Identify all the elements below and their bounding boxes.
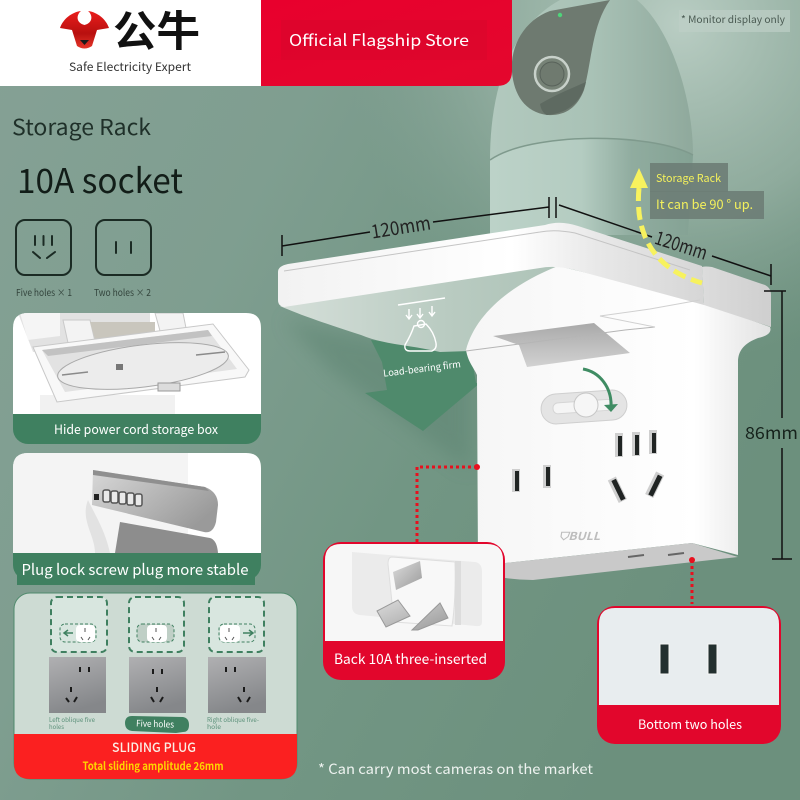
note: monitor display only: * Monitor display only (681, 11, 786, 26)
slide option: centre (129, 597, 186, 713)
tag: five holes: Five holes (136, 716, 174, 731)
load-bearing arrow (365, 340, 480, 431)
socket holes (512, 430, 664, 503)
tag: five holes (125, 716, 189, 733)
shelf right side (702, 266, 771, 327)
heading: 10A socket: 10A socket (17, 154, 183, 203)
callout: storage rack 90 degree: Storage Rack (656, 170, 721, 186)
dimension: height 86mm (745, 291, 798, 559)
slide option: left oblique (49, 597, 107, 731)
heading: storage rack: Storage Rack (12, 110, 151, 142)
callout: storage rack 90 degree: It can be 90 ° up. (656, 194, 753, 213)
bracket slot (493, 323, 630, 367)
shelf load icon (398, 298, 445, 351)
header: store banner (261, 0, 512, 86)
rotate arrow (583, 369, 618, 412)
sliding amplitude: Total sliding amplitude 26mm (82, 758, 224, 774)
shelf front lip (278, 223, 704, 307)
caption: Bottom two holes (638, 714, 742, 733)
arrow: lift up (630, 168, 702, 283)
drop shadow (285, 320, 470, 470)
callout: bottom two holes (597, 606, 781, 744)
caption: Plug lock screw plug more stable (22, 559, 248, 580)
slide option: right oblique: Right oblique five- (207, 714, 259, 724)
label: five holes x1: Five holes × 1 (16, 285, 72, 299)
callout: storage rack 90 degree (650, 163, 764, 219)
slide option: right oblique (207, 597, 266, 731)
icon: bull logo (60, 11, 109, 48)
note: monitor display only (679, 10, 790, 32)
load-bearing arrow: Load-bearing firm (382, 356, 461, 380)
dimension: depth 120mm (556, 197, 771, 285)
icon: two holes (96, 220, 151, 275)
panel: plug lock (13, 453, 261, 585)
slide option: left oblique: Left oblique five (49, 714, 95, 724)
slider knob (540, 389, 628, 425)
dimension: depth 120mm: 120mm (652, 223, 711, 266)
caption: Hide power cord storage box (54, 419, 218, 438)
caption: Back 10A three-inserted (334, 649, 487, 669)
header: logo block (0, 0, 261, 86)
panel: storage box (13, 313, 261, 444)
shelf underside (280, 265, 700, 352)
slide option: left oblique: holes (49, 721, 64, 731)
label: two holes x2: Two holes × 2 (94, 285, 151, 299)
socket body (466, 266, 770, 566)
callout: back three-pin (323, 542, 505, 680)
bull mark: ⛉BULL (559, 528, 601, 544)
panel: sliding plug (14, 593, 297, 779)
connector: bottom socket (689, 557, 695, 604)
camera (490, 0, 693, 235)
socket bottom face (478, 543, 738, 580)
slide option: right oblique: hole (207, 721, 221, 731)
icon: five holes (16, 220, 71, 275)
connector: back socket (417, 464, 480, 542)
header: store banner: Official Flagship Store (289, 27, 469, 51)
footnote: * Can carry most cameras on the market (318, 759, 594, 779)
dimension: width 120mm: 120mm (369, 208, 433, 245)
logo slogan: Safe Electricity Expert (69, 59, 192, 75)
product: storage rack shelf and socket body (278, 223, 771, 580)
sliding plug title: SLIDING PLUG (112, 737, 196, 756)
dimension: width 120mm (282, 197, 549, 256)
dimension: height 86mm: 86mm (745, 419, 798, 444)
camera lens panel (512, 0, 610, 115)
